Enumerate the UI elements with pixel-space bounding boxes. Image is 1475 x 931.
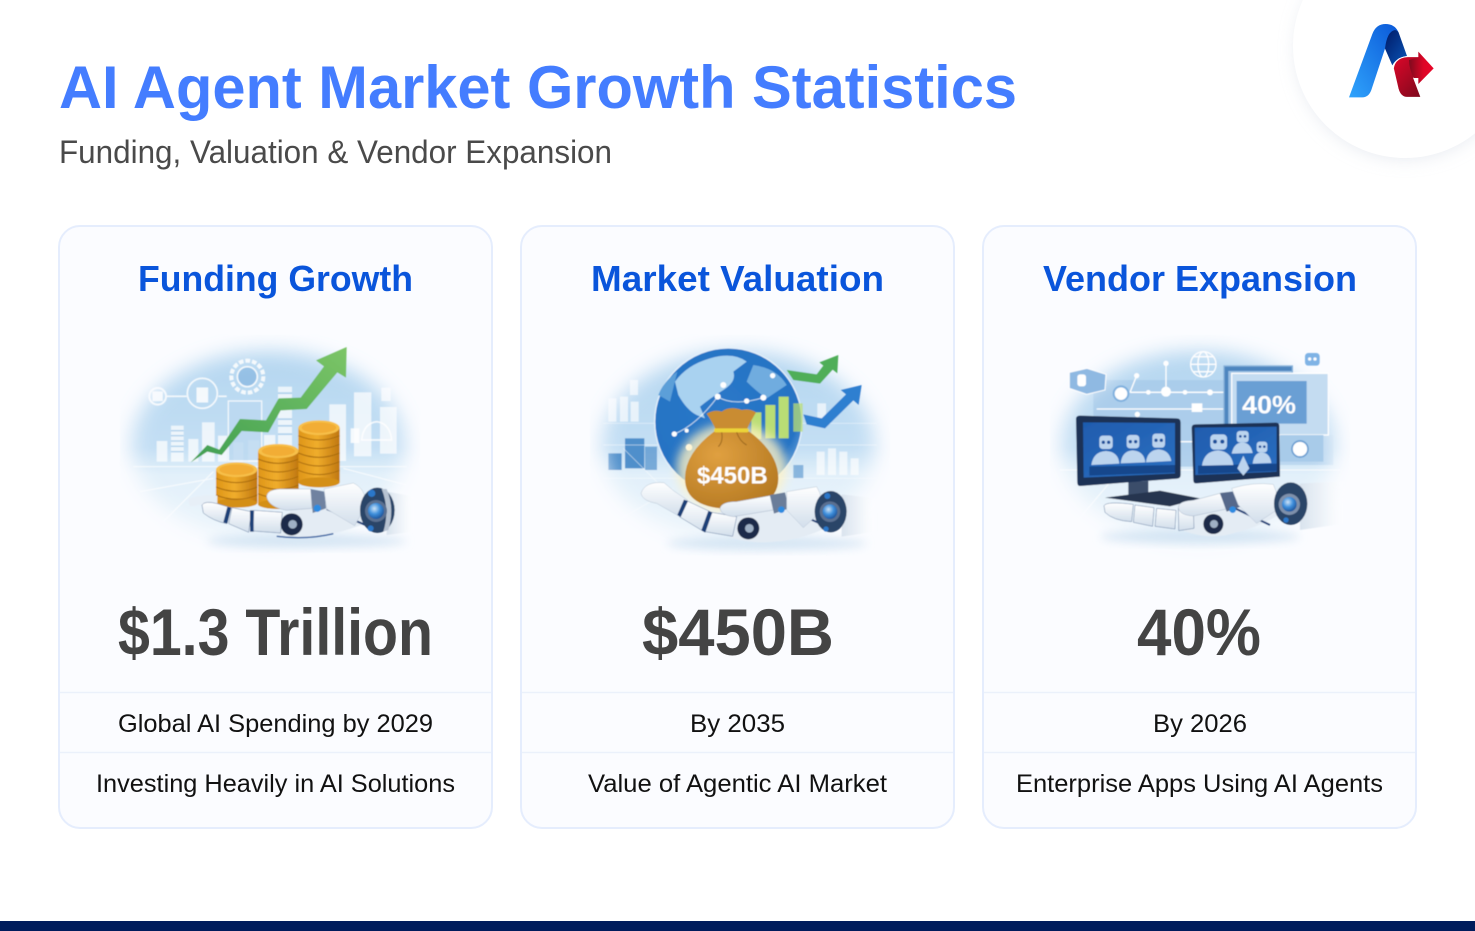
text: value label: Value of Agentic AI Market	[588, 770, 887, 798]
heading: vendor expansion: Vendor Expansion	[1043, 258, 1357, 299]
heading: market valuation: Market Valuation	[591, 258, 884, 299]
panel: market valuation	[521, 226, 954, 828]
icon: robot hand	[641, 482, 877, 550]
icon: money bag	[677, 408, 787, 513]
arrow: blue trend arrow	[803, 385, 862, 428]
arrow: rising green arrow	[191, 347, 347, 462]
panel: vendor expansion	[983, 226, 1416, 828]
text: year label: By 2035	[690, 710, 785, 738]
icon: right monitor with robots	[1192, 423, 1280, 483]
icon: brand logo	[1349, 24, 1434, 97]
panel: 40 percent screen	[1224, 366, 1328, 462]
icon: money bag: $450B	[697, 462, 768, 489]
icon: robot hand	[188, 483, 415, 548]
icon: globe	[655, 348, 802, 495]
heading: funding growth: Funding Growth	[138, 258, 413, 299]
icon: chat bubble with agent	[1069, 353, 1320, 401]
arrow: green trend arrow	[787, 355, 838, 384]
text: enterprise label: Enterprise Apps Using AI Agents	[1016, 770, 1383, 798]
illustration: robot hand holding money bag and globe	[590, 335, 890, 560]
footer bar	[0, 921, 1475, 931]
coins: stack of gold coins	[216, 420, 340, 509]
statistic: funding value: $1.3 Trillion	[118, 595, 433, 669]
illustration: robot hand holding monitors with AI agents	[1050, 335, 1350, 560]
chart: green bars	[751, 397, 803, 439]
title: AI Agent Market Growth Statistics	[59, 54, 1017, 121]
statistic: market value: $450B	[642, 595, 834, 669]
subtitle: Funding, Valuation & Vendor Expansion	[59, 134, 612, 170]
statistic: vendor percent: 40%	[1137, 595, 1261, 669]
logo badge	[1293, 0, 1475, 158]
text: spending label: Global AI Spending by 2029	[118, 710, 433, 738]
text: year label: By 2026	[1153, 710, 1247, 738]
panel: funding growth	[59, 226, 492, 828]
icon: robot hand	[1100, 482, 1347, 543]
panel: 40 percent screen: 40%	[1242, 393, 1296, 420]
illustration: robot hand holding coins with rising arrow	[120, 335, 420, 560]
text: investing label: Investing Heavily in AI Solutions	[96, 770, 455, 798]
icon: left monitor with robots	[1076, 416, 1200, 506]
